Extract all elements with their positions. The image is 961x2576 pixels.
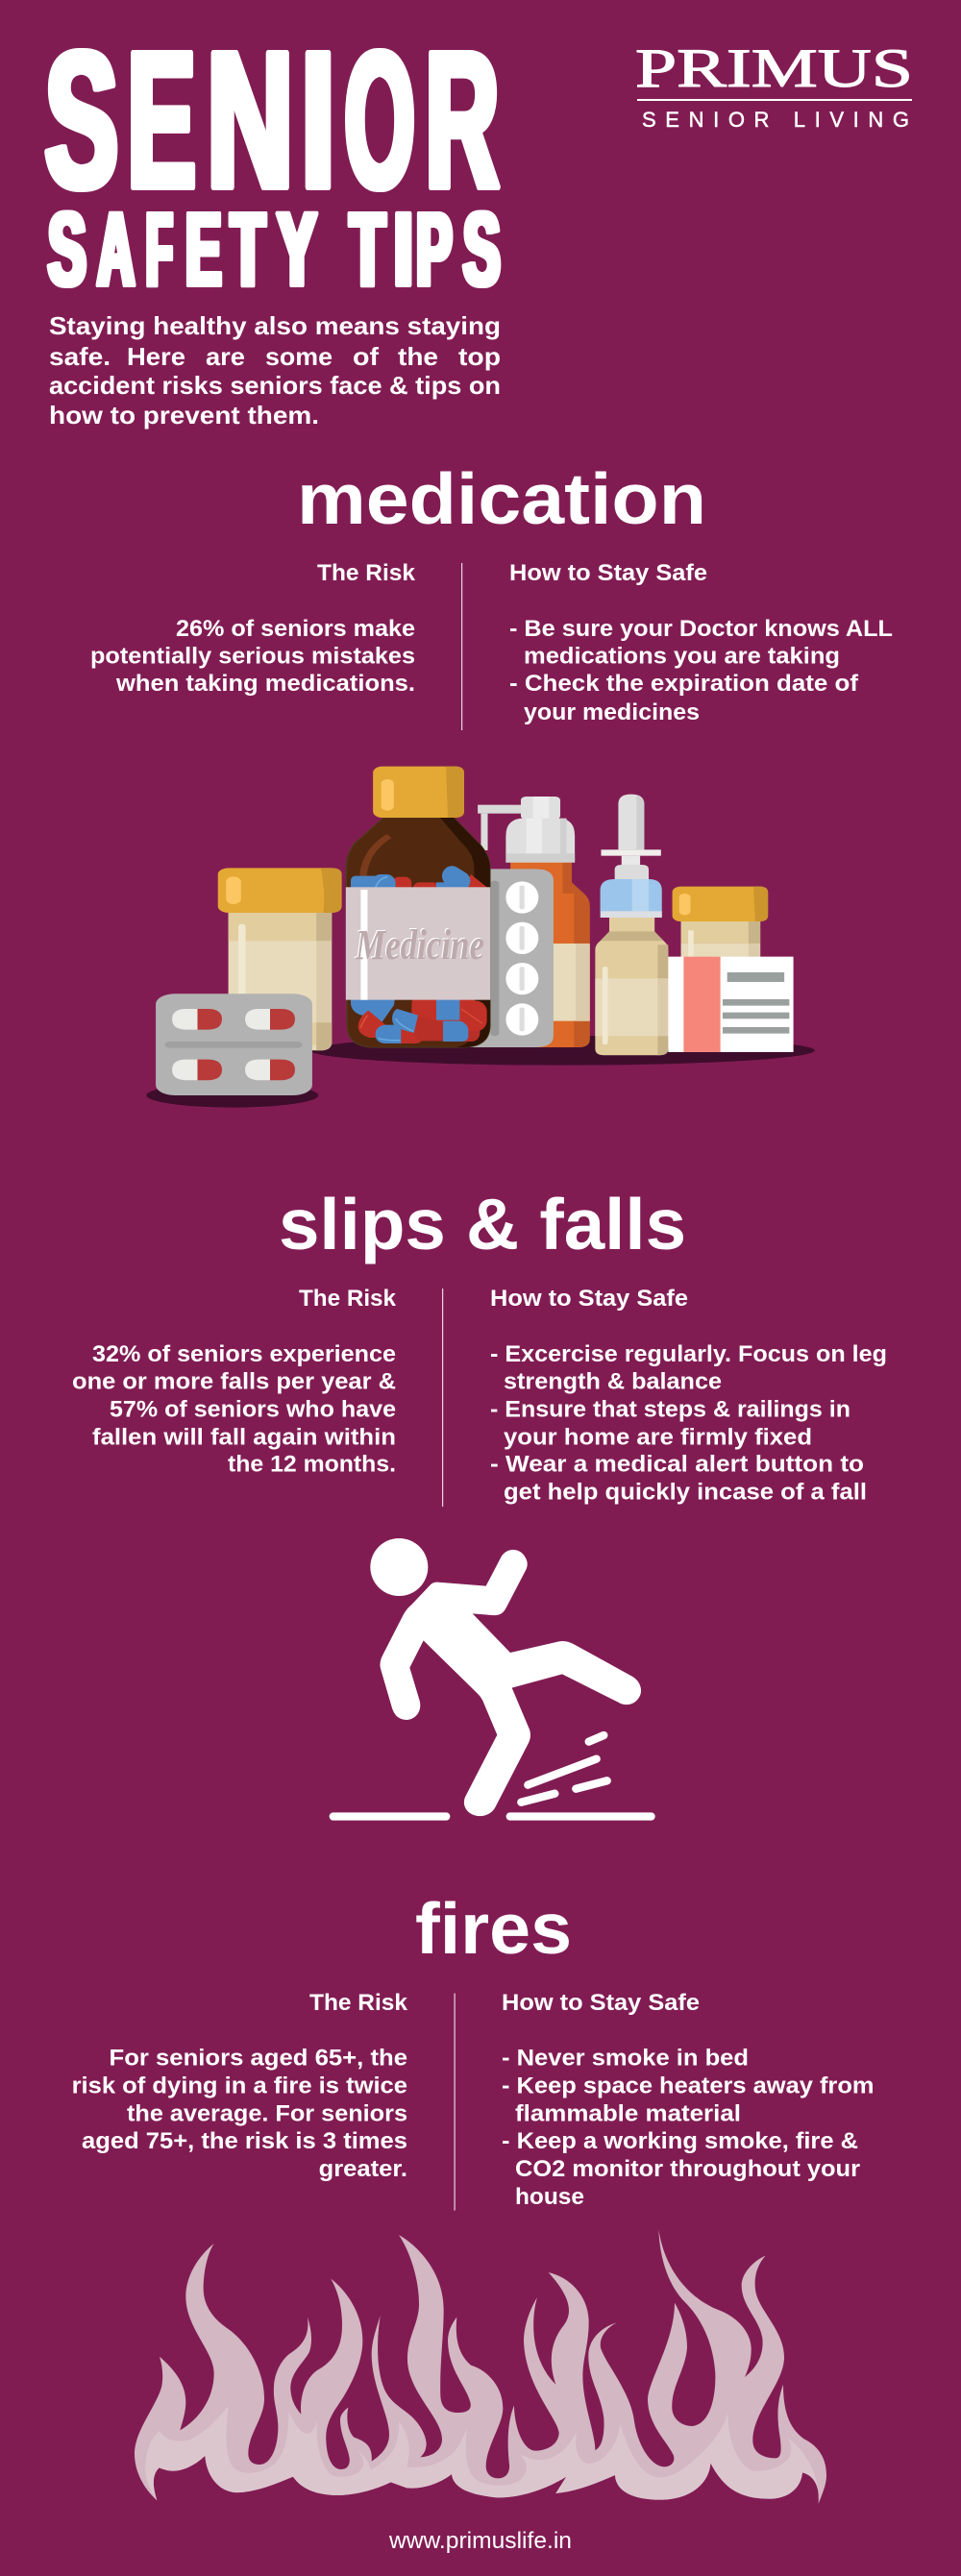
section: medication — [90, 458, 893, 730]
panel: falls how to stay safe: your home are firmly fixed — [504, 1424, 812, 1451]
title — [45, 12, 500, 307]
intro paragraph: how to prevent them. — [49, 401, 319, 429]
intro paragraph: some — [265, 342, 333, 371]
title: O — [345, 12, 414, 229]
capsule blister pack — [156, 994, 312, 1095]
title: E — [186, 190, 221, 307]
illustration: flames — [135, 2229, 826, 2504]
panel: fires risk: aged 75+, the risk is 3 times — [82, 2128, 407, 2154]
panel: medication risk — [90, 560, 416, 697]
panel: medication risk: potentially serious mistakes — [90, 644, 415, 669]
panel: falls how to stay safe: - Excercise regularly. Focus on leg — [490, 1341, 887, 1367]
intro paragraph — [49, 311, 501, 429]
illustration: medicine bottles and pills — [146, 767, 815, 1108]
title: S — [463, 190, 500, 307]
panel: medication how to stay safe: How to Stay Safe — [509, 560, 707, 586]
panel: medication how to stay safe: - Be sure your Doctor knows ALL — [509, 616, 893, 642]
intro paragraph: safe. — [49, 342, 111, 371]
footer website: www.primuslife.in — [388, 2528, 572, 2554]
intro paragraph: Here — [127, 342, 185, 371]
title: I — [394, 190, 413, 307]
panel: fires how to stay safe: flammable material — [515, 2100, 741, 2126]
panel: fires how to stay safe: - Never smoke in bed — [502, 2045, 749, 2072]
logo: Primus Senior Living: SENIOR LIVING — [642, 108, 909, 132]
panel: fires risk: risk of dying in a fire is twice — [72, 2073, 407, 2098]
panel: fires risk: greater. — [319, 2156, 407, 2182]
panel: falls how to stay safe: get help quickly incase of a fall — [504, 1480, 867, 1506]
orange spray bottle — [478, 797, 590, 1047]
panel: fires how to stay safe — [502, 1990, 875, 2210]
panel: fires how to stay safe: CO2 monitor throughout your — [515, 2156, 860, 2182]
icon: person slipping — [330, 1538, 655, 1821]
nasal spray — [595, 795, 668, 1055]
heading: fires: fires — [415, 1888, 572, 1969]
title: T — [231, 190, 265, 307]
title: F — [146, 190, 172, 307]
large brown bottle — [346, 767, 490, 1047]
intro paragraph: Staying healthy also means staying — [49, 311, 501, 340]
bottle label text: Medicine — [354, 920, 483, 968]
panel: fires how to stay safe: - Keep a working smoke, fire & — [502, 2128, 858, 2154]
intro paragraph: of — [353, 342, 379, 371]
panel: fires how to stay safe: - Keep space heaters away from — [502, 2073, 875, 2098]
intro paragraph: top — [458, 342, 501, 371]
panel: fires risk — [72, 1990, 408, 2182]
intro paragraph: are — [206, 342, 245, 371]
panel: falls risk: the 12 months. — [228, 1452, 396, 1478]
panel: medication how to stay safe: your medicines — [524, 699, 700, 725]
logo: Primus Senior Living: PRIMUS — [635, 38, 913, 99]
panel: falls how to stay safe — [490, 1286, 887, 1506]
panel: falls how to stay safe: strength & balance — [504, 1368, 722, 1395]
bottle label text: Medicine — [355, 921, 484, 969]
heading: medication: medication — [297, 458, 706, 539]
title: E — [128, 12, 196, 229]
panel: fires how to stay safe: house — [515, 2184, 584, 2210]
panel: falls how to stay safe: How to Stay Safe — [490, 1286, 688, 1312]
panel: falls risk: The Risk — [299, 1286, 397, 1312]
panel: falls risk: 57% of seniors who have — [110, 1397, 396, 1422]
pills in bottle, upper — [351, 862, 487, 898]
vertical blister pack — [463, 869, 554, 1047]
panel: falls how to stay safe: - Wear a medical alert button to — [490, 1452, 864, 1478]
title: S — [45, 12, 118, 229]
logo: Primus Senior Living — [635, 38, 913, 132]
small jar and box — [668, 887, 794, 1052]
panel: falls how to stay safe: - Ensure that steps & railings in — [490, 1397, 850, 1422]
panel: medication risk: The Risk — [317, 560, 416, 586]
panel: falls risk: one or more falls per year & — [72, 1368, 396, 1395]
title: Y — [278, 190, 316, 307]
panel: falls risk: fallen will fall again within — [92, 1424, 396, 1451]
pills in bottle, lower — [351, 993, 487, 1043]
panel: fires risk: For seniors aged 65+, the — [110, 2045, 407, 2072]
panel: medication risk: 26% of seniors make — [176, 616, 415, 642]
panel: medication how to stay safe: medications you are taking — [524, 644, 840, 669]
title: S — [48, 190, 86, 307]
panel: fires risk: The Risk — [309, 1990, 408, 2016]
section: fires — [72, 1888, 875, 2210]
title: N — [207, 12, 293, 229]
intro paragraph: accident risks seniors face & tips on — [49, 371, 501, 400]
title: T — [350, 190, 385, 307]
title: P — [417, 190, 452, 307]
panel: falls risk: 32% of seniors experience — [92, 1341, 396, 1367]
left jar — [218, 868, 342, 1050]
title: R — [426, 12, 499, 229]
heading: slips & falls: slips & falls — [279, 1184, 686, 1264]
panel: fires how to stay safe: How to Stay Safe — [502, 1990, 700, 2016]
section: slips and falls — [72, 1184, 887, 1507]
title: I — [301, 12, 335, 229]
panel: medication how to stay safe: - Check the expiration date of — [509, 671, 859, 697]
panel: falls risk — [72, 1286, 397, 1478]
intro paragraph: the — [398, 342, 438, 371]
title: A — [98, 190, 135, 307]
panel: medication risk: when taking medications. — [115, 671, 415, 697]
panel: medication how to stay safe — [509, 560, 893, 725]
panel: fires risk: the average. For seniors — [127, 2100, 407, 2126]
